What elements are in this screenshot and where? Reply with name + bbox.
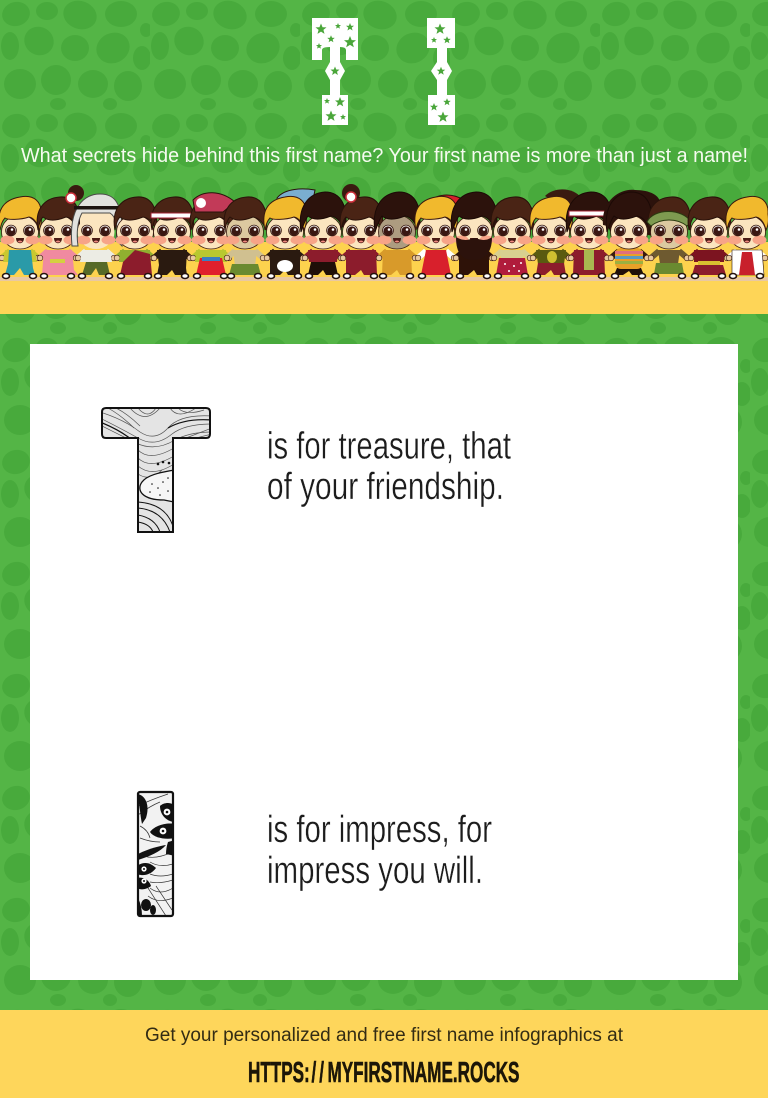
text: I line xyxy=(267,809,492,892)
child: striped sweater xyxy=(603,190,660,278)
icon: zentangle letter I xyxy=(137,792,175,916)
panel: white content card xyxy=(30,344,738,980)
child: blond in white and red xyxy=(726,196,768,278)
letter T xyxy=(312,18,358,125)
child: red hat and red skirt xyxy=(190,193,235,278)
icon: zentangle letter T xyxy=(100,405,212,535)
child: blond in teal overalls xyxy=(0,196,41,278)
child: blond in olive and maroon xyxy=(530,189,581,278)
child: blond in red dress xyxy=(415,195,464,278)
child: dark-skinned in orange stripes xyxy=(374,192,420,278)
title: first name letters T I xyxy=(312,18,455,125)
child: maroon with flower bun xyxy=(340,184,383,278)
text: I line: impress you will. xyxy=(267,850,483,892)
child: tan grass skirt xyxy=(224,197,267,278)
text: T line xyxy=(267,426,511,508)
footer url: HTTPS://MYFIRSTNAME.ROCKS xyxy=(248,1056,519,1089)
footer text: Get your personalized and free first name infographics at xyxy=(145,1025,624,1046)
text: T line: is for treasure, that xyxy=(267,426,511,468)
text: T line: of your friendship. xyxy=(267,466,504,508)
letter I xyxy=(427,18,455,125)
text: I line: is for impress, for xyxy=(267,809,492,851)
child: flower bun in pink kimono xyxy=(37,185,84,278)
child: bearded in dark robe xyxy=(451,192,497,278)
tagline: What secrets hide behind this first name? Your first name is more than just a name! xyxy=(21,145,748,167)
footer band xyxy=(0,1010,768,1098)
child: tall dark hat xyxy=(300,192,346,278)
child: maroon robe xyxy=(688,197,731,278)
child: blond with blue cap xyxy=(264,189,315,278)
child: green headband and grass skirt xyxy=(647,197,691,278)
child: green and maroon robe xyxy=(114,197,157,278)
child: white headscarf xyxy=(71,194,122,278)
child: headband in maroon robe xyxy=(566,192,612,278)
yellow band xyxy=(0,242,768,314)
child: headband in dark tunic xyxy=(151,197,194,278)
parade of cartoon children xyxy=(0,184,768,278)
child: polka-dot skirt xyxy=(491,197,534,278)
